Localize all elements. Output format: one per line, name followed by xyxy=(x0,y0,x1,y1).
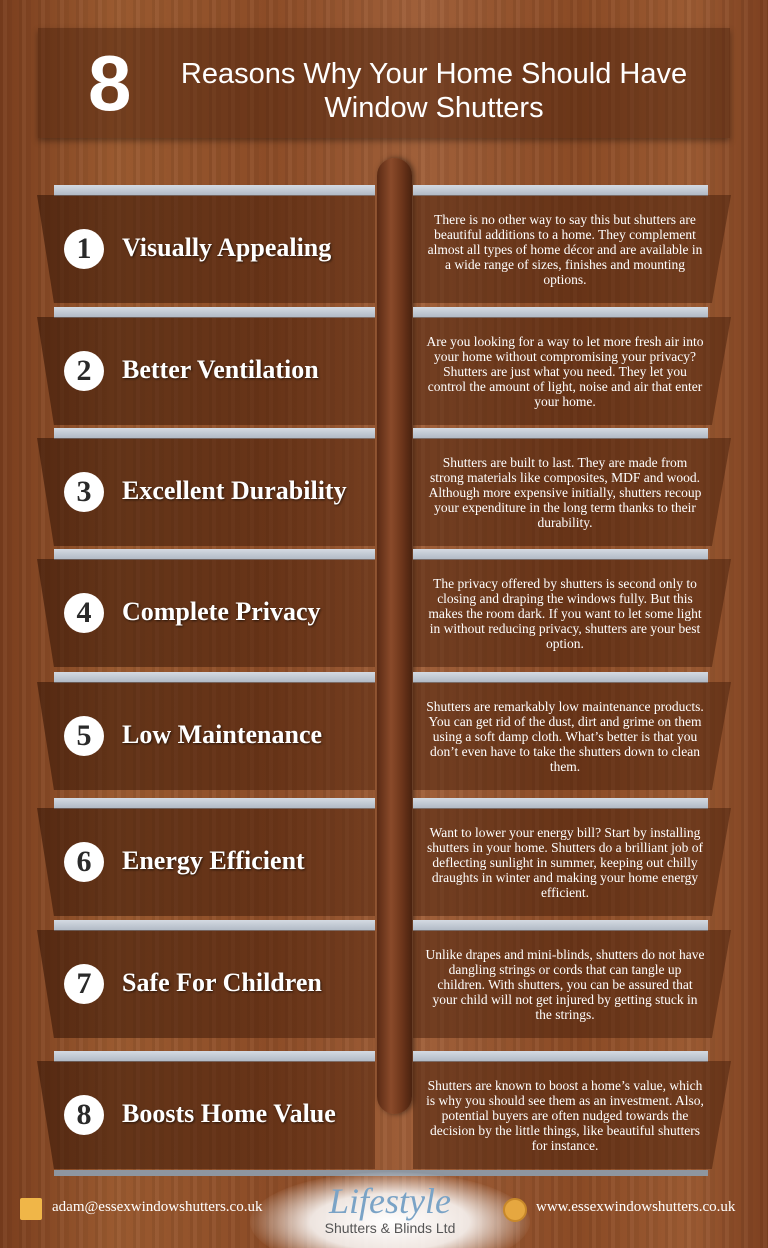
row 5 xyxy=(37,672,731,790)
row 5: Shutters are remarkably low maintenance products. You can get rid of the dust, dirt and grime on them using a soft damp cloth. What’s better is that you don’t even have to take the shutters down to clean them. xyxy=(426,698,704,774)
icon: globe xyxy=(503,1198,527,1222)
icon: email xyxy=(20,1198,42,1220)
row 5: Low Maintenance xyxy=(122,720,322,749)
title text: Reasons Why Your Home Should Have Window Shutters xyxy=(181,58,687,124)
row 1: Visually Appealing xyxy=(122,233,331,262)
logo: Lifestyle xyxy=(329,1181,451,1221)
row 2: Better Ventilation xyxy=(122,355,319,384)
website text: www.essexwindowshutters.co.uk xyxy=(536,1199,735,1215)
logo glow xyxy=(250,1172,530,1248)
row 4 xyxy=(37,549,731,667)
row 3: 3 xyxy=(76,475,92,508)
row 4: 4 xyxy=(76,596,92,629)
row 7: 7 xyxy=(76,967,92,1000)
email text: adam@essexwindowshutters.co.uk xyxy=(52,1199,262,1215)
row 8: 8 xyxy=(76,1098,92,1131)
row 1 xyxy=(37,185,731,303)
bottom slat xyxy=(54,1170,708,1176)
title panel xyxy=(38,28,730,138)
row 2 xyxy=(37,307,731,425)
row 3 xyxy=(37,428,731,546)
row 4: The privacy offered by shutters is second only to closing and draping the windows fully. But this makes the room dark. If you want to let some light in without reducing privacy, shutters are your best option. xyxy=(428,576,702,650)
row 1: There is no other way to say this but shutters are beautiful additions to a home. They complement almost all types of home décor and are available in a wide range of sizes, finishes and mounting options. xyxy=(428,212,702,286)
logo: Shutters & Blinds Ltd xyxy=(325,1220,455,1236)
row 6 xyxy=(37,798,731,916)
row 7: Unlike drapes and mini-blinds, shutters do not have dangling strings or cords that can tangle up children. With shutters, you can be assured that your child will not get injured by getting stuck in the strings. xyxy=(426,946,704,1022)
row 3: Excellent Durability xyxy=(122,476,347,505)
row 6: 6 xyxy=(76,845,92,878)
row 2: 2 xyxy=(76,354,92,387)
logo xyxy=(325,1181,455,1236)
row 2: Are you looking for a way to let more fresh air into your home without compromising your privacy? Shutters are just what you need. They let you control the amount of light, noise and air that enter your home. xyxy=(426,334,704,408)
row 1: 1 xyxy=(76,232,92,265)
row 8: Boosts Home Value xyxy=(122,1099,336,1128)
row 8: Shutters are known to boost a home’s value, which is why you should see them as an investment. Also, potential buyers are often nudged towards the decision by the little things, like beautiful shutters for instance. xyxy=(426,1078,704,1152)
title number: 8 xyxy=(88,39,131,127)
row 6: Want to lower your energy bill? Start by installing shutters in your home. Shutters do a brilliant job of deflecting sunlight in summer, keeping out chilly draughts in winter and making your home energy efficient. xyxy=(427,824,703,900)
row 8 xyxy=(37,1051,731,1169)
row 7: Safe For Children xyxy=(122,968,322,997)
row 7 xyxy=(37,920,731,1038)
row 5: 5 xyxy=(76,719,92,752)
row 6: Energy Efficient xyxy=(122,846,305,875)
central pole xyxy=(377,158,412,1114)
row 3: Shutters are built to last. They are made from strong materials like composites, MDF and wood. Although more expensive initially, shutters recoup your expenditure in the long term thanks to their durability. xyxy=(429,454,701,530)
row 4: Complete Privacy xyxy=(122,597,321,626)
